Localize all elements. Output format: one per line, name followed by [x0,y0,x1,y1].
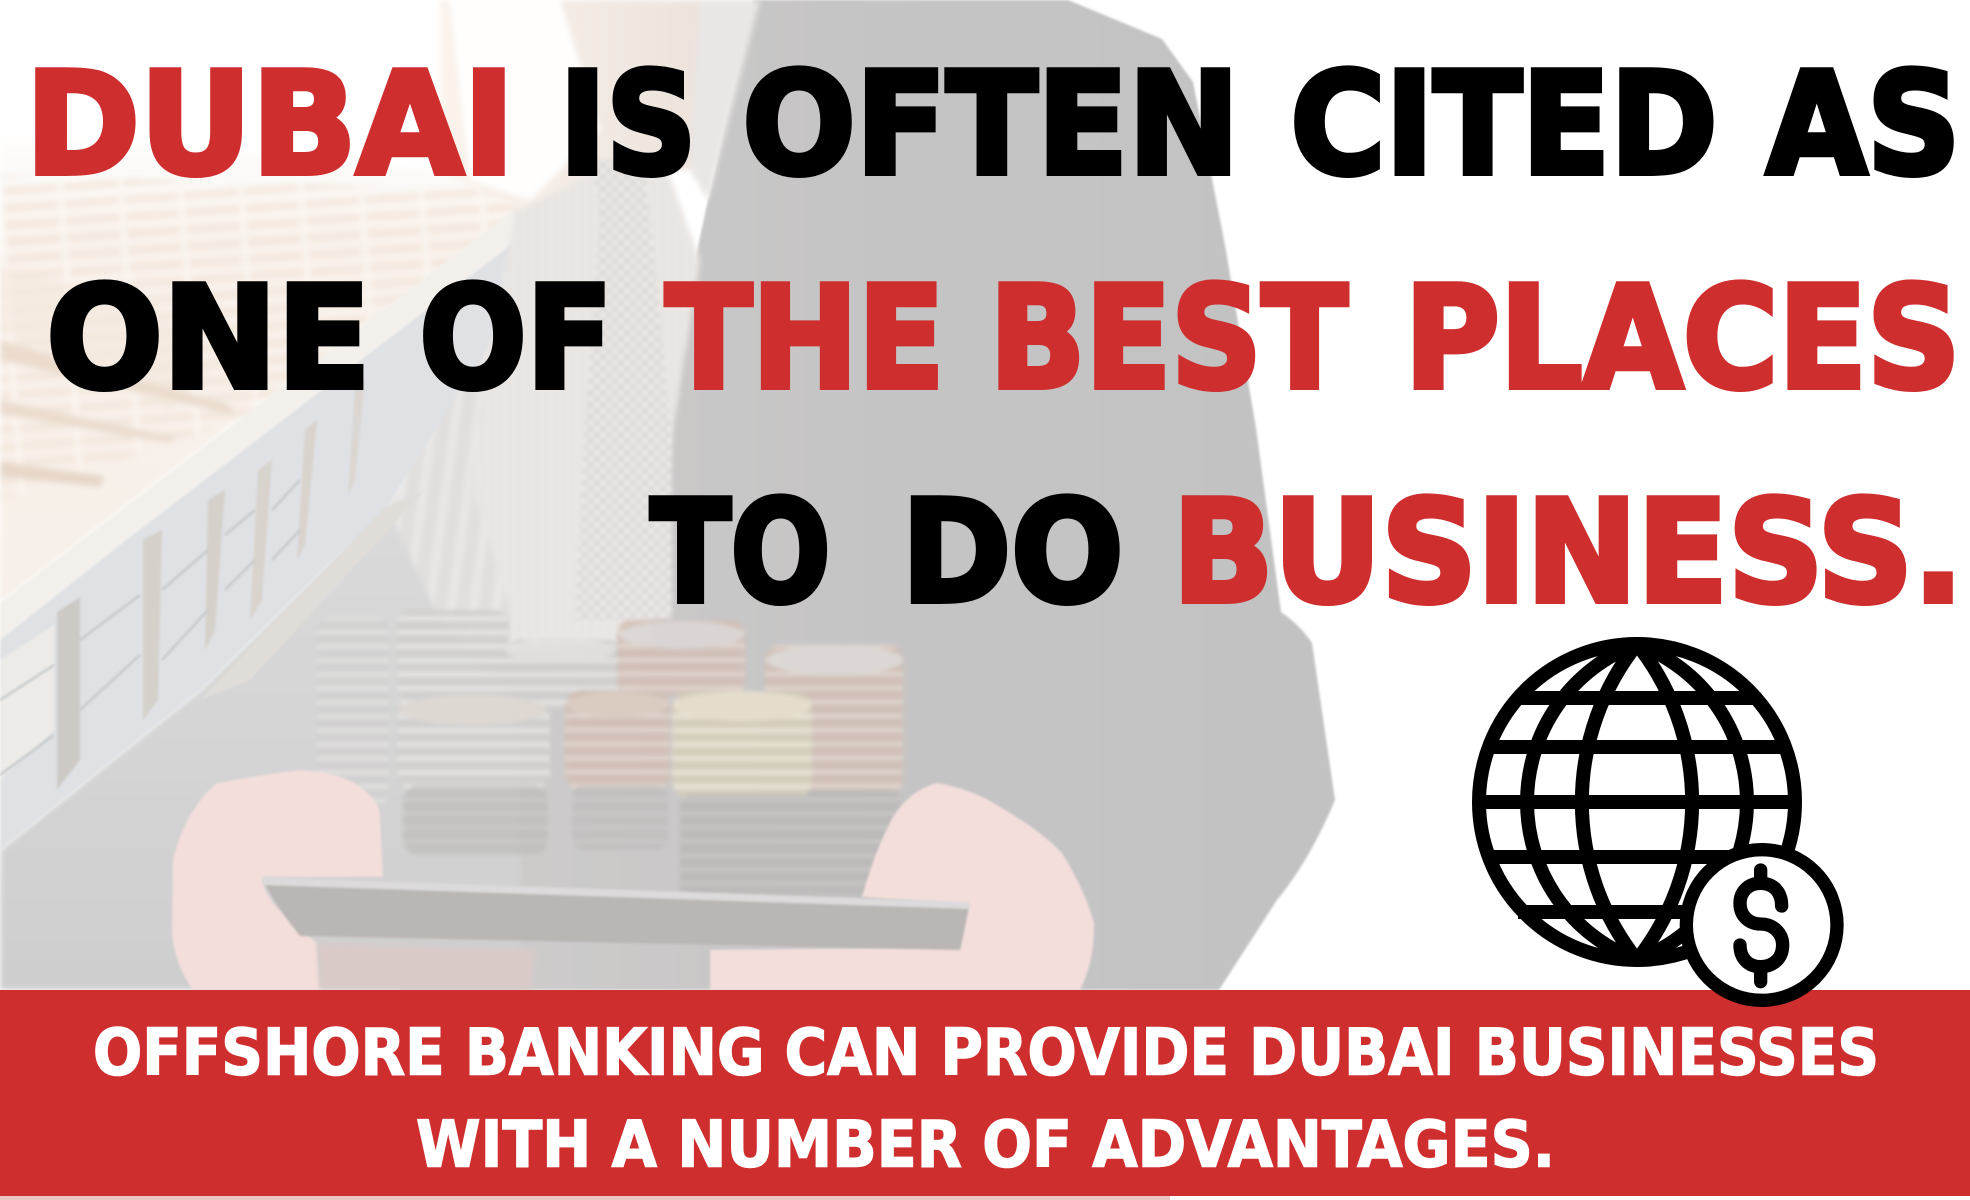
neck and collar [440,0,760,210]
globe [1479,644,1795,960]
building roof [0,130,540,603]
jacket lower arm [0,507,520,990]
heading line 2: OF [420,257,612,421]
background photo: businessman with coins and building [0,0,1335,1200]
banner text [93,1016,1879,1182]
suit jacket [400,0,1335,990]
bottom banner [0,990,1970,1196]
heading line 3: DO [902,471,1124,635]
left hand [172,770,383,990]
heading line 1: DUBAI [26,43,514,207]
heading line 2 [46,257,1960,421]
heading line 3: TO [650,471,830,635]
tablet [263,877,969,950]
sleeve and mid-tone area beside shirt [387,190,650,660]
heading line 2: THE [666,257,944,421]
heading line 1: CITED [1290,43,1718,207]
building facade with windows and fins [0,190,560,850]
right hand [710,783,1094,990]
heading [26,43,1964,635]
heading line 3 [650,471,1964,635]
icon: globe with dollar coin [1479,644,1837,1000]
dollar coin [1686,850,1837,1000]
heading line 2: ONE [46,257,370,421]
shirt [470,150,700,640]
heading line 2: BEST [990,257,1348,421]
heading line 1: OFTEN [742,43,1240,207]
heading line 1 [26,43,1960,207]
coin stacks [317,610,903,895]
necktie [575,160,672,620]
fingers under tablet [317,943,536,990]
banner line 2: WITH A NUMBER OF ADVANTAGES. [416,1108,1555,1182]
photo strip below banner [0,1194,1170,1200]
heading line 1: IS [560,43,696,207]
